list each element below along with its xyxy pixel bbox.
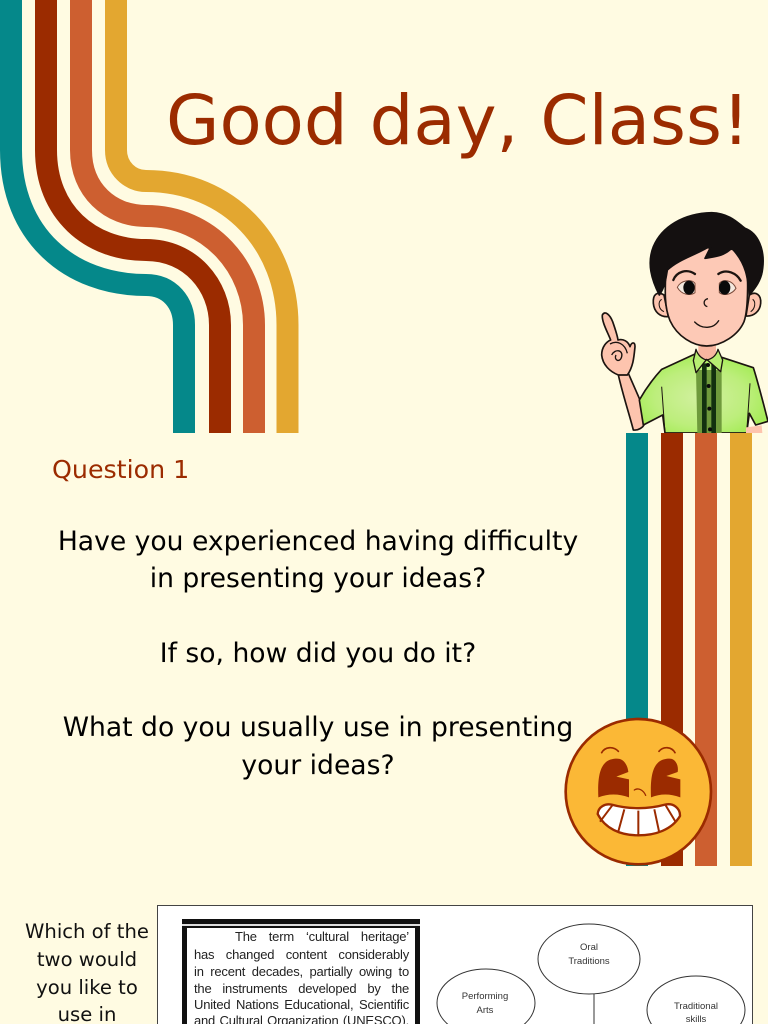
brows [673, 271, 741, 281]
hand [602, 313, 635, 375]
concept diagram: Traditions [568, 956, 610, 967]
side question text [25, 920, 149, 1024]
concept diagram: Oral [580, 942, 598, 953]
question label: Question 1 [52, 455, 189, 484]
forearm skin right [746, 425, 762, 433]
placket [696, 370, 722, 433]
excerpt lines: in recent decades, partially owing to [194, 964, 409, 979]
side question text: you like to [36, 976, 138, 999]
illustration: boy pointing up [600, 212, 768, 433]
excerpt lines: the instruments developed by the [194, 981, 409, 996]
question text block: Have you experienced having difficulty [58, 526, 578, 557]
question text block: If so, how did you do it? [160, 638, 476, 669]
side question text: two would [37, 948, 137, 971]
face [665, 247, 748, 346]
neck [698, 340, 716, 360]
nose and mouth [704, 299, 708, 307]
question text block [58, 526, 578, 781]
excerpt lines: has changed content considerably [194, 947, 409, 962]
shirt [639, 354, 768, 433]
excerpt lines: The term ‘cultural heritage’ [235, 929, 409, 944]
image panel: text versus diagram [157, 905, 753, 1024]
side question text: Which of the [25, 920, 149, 943]
question text block: in presenting your ideas? [150, 563, 486, 594]
retro curved stripes [0, 0, 298, 433]
question text block: What do you usually use in presenting [63, 712, 573, 743]
text excerpt box [182, 919, 420, 1024]
ears [653, 293, 668, 317]
buttons [706, 363, 710, 367]
hair [650, 213, 763, 295]
collar [693, 349, 723, 373]
excerpt lines: United Nations Educational, Scientific [194, 997, 409, 1012]
eyes [677, 281, 695, 294]
vertical retro stripes [626, 433, 752, 866]
concept diagram: Traditional [674, 1001, 718, 1012]
question text block: your ideas? [241, 750, 395, 781]
title: Good day, Class! [166, 81, 750, 161]
icon: grinning emoji [564, 718, 712, 866]
arm [618, 373, 644, 430]
concept diagram: Arts [477, 1005, 494, 1016]
concept diagram: Performing [462, 991, 508, 1002]
